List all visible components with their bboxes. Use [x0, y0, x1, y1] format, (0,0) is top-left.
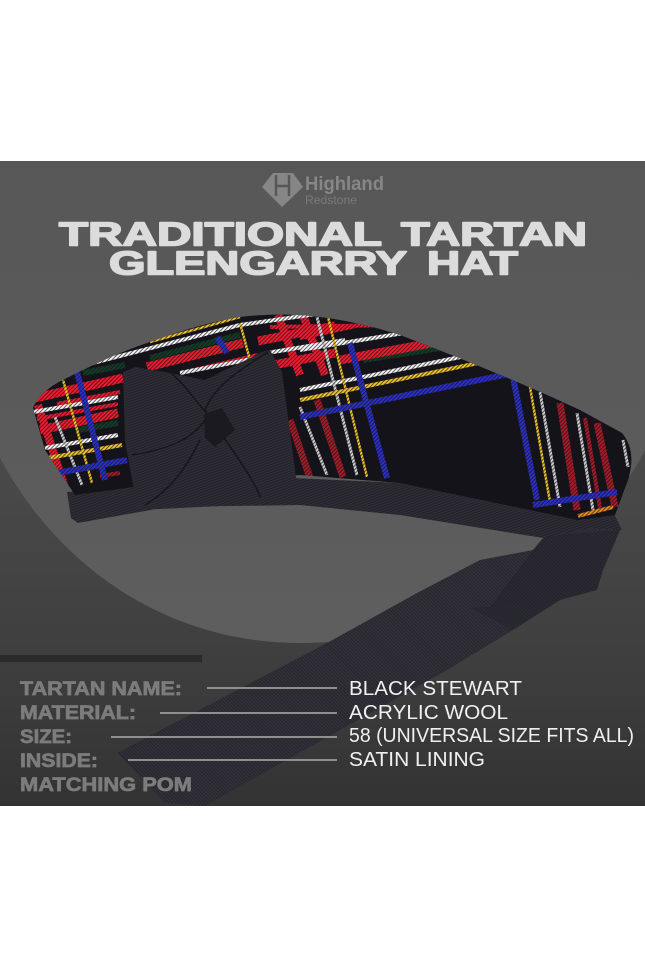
divider bar [0, 655, 202, 662]
tartan: green bands [77, 335, 440, 430]
logo: Highland Redstone [262, 173, 384, 207]
spec labels: SIZE: [20, 726, 72, 748]
tartan: white lines [33, 312, 628, 510]
title: TRADITIONAL [59, 216, 382, 252]
title: TARTAN [401, 216, 587, 252]
tartan: bright red bands [35, 315, 437, 488]
spec labels [20, 678, 192, 796]
spec labels: INSIDE: [20, 750, 98, 772]
spec values: SATIN LINING [349, 749, 485, 771]
spec labels: MATCHING POM [20, 774, 192, 796]
title: GLENGARRY [109, 244, 407, 282]
logo: Highland Redstone: Highland [305, 174, 384, 195]
spec values: 58 (UNIVERSAL SIZE FITS ALL) [349, 725, 634, 747]
spec values [349, 678, 634, 771]
connector lines [111, 688, 337, 760]
spec values: ACRYLIC WOOL [349, 702, 508, 724]
panel: background [0, 161, 645, 806]
tartan: twill weave overlay [33, 314, 632, 518]
spec labels: TARTAN NAME: [20, 678, 182, 700]
spec labels: MATERIAL: [20, 702, 136, 724]
hat brim [67, 478, 622, 538]
title: HAT [427, 244, 518, 282]
hat tail ribbon [117, 513, 620, 806]
infographic canvas [0, 161, 645, 806]
hat tartan crown [33, 314, 632, 520]
bow [123, 350, 297, 510]
tartan: blue bands [57, 337, 617, 505]
tartan: muted red bands [100, 400, 615, 510]
title [59, 216, 587, 282]
tartan: yellow lines [48, 317, 613, 516]
logo: Highland Redstone: Redstone [305, 193, 357, 207]
spec values: BLACK STEWART [349, 678, 522, 700]
